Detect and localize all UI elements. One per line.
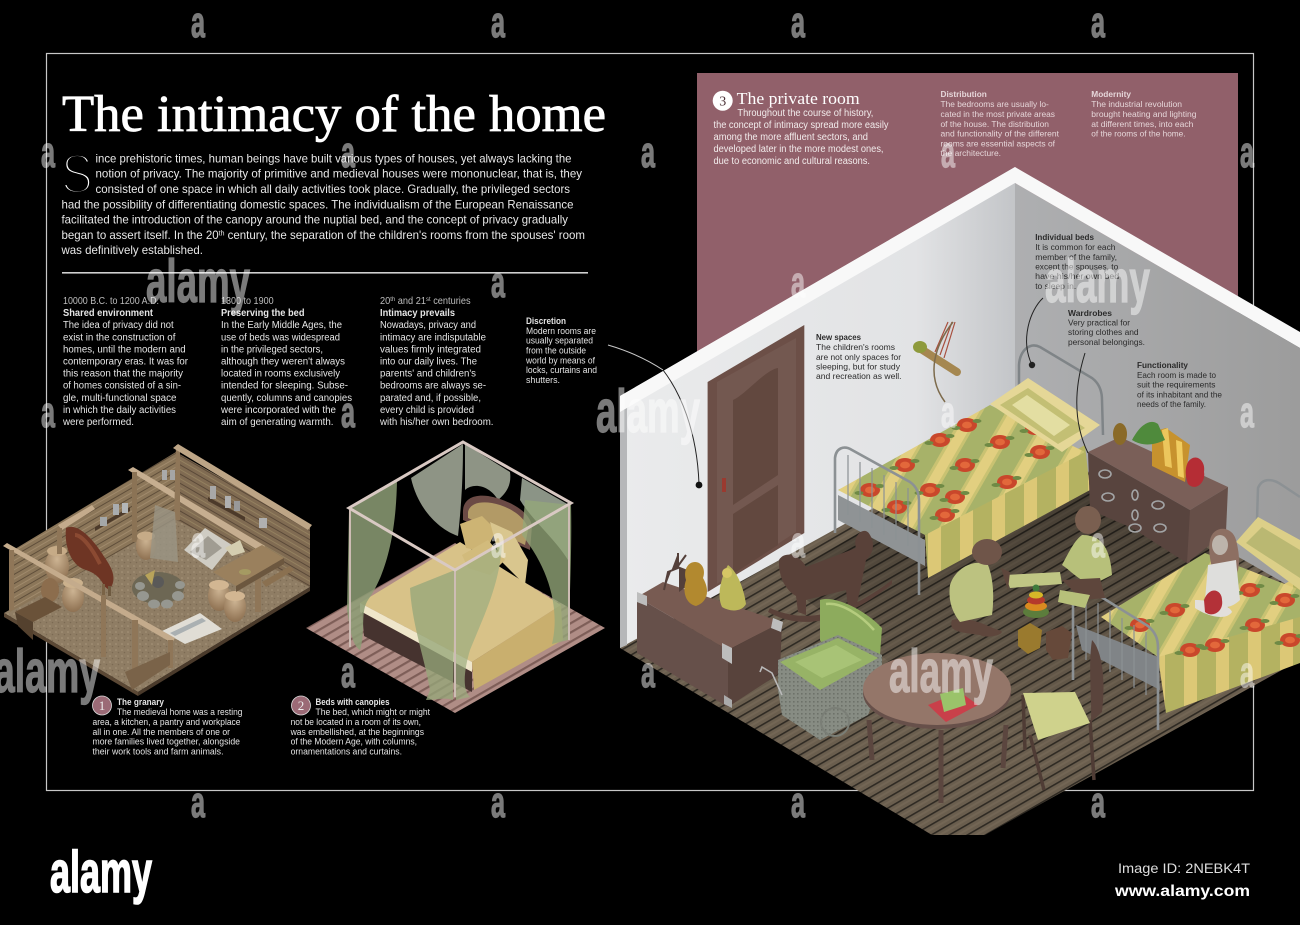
intro text block: had the possibility of differentiating domestic spaces. The individualism of the European Renaissance — [62, 198, 574, 211]
hearth stones — [132, 570, 185, 608]
heading: the private room — [713, 89, 888, 167]
granary back walls — [10, 452, 176, 612]
intro text block: ince prehistoric times, human beings have built various types of houses, yet always lacking the — [96, 152, 572, 165]
text: modernity — [1091, 89, 1197, 138]
heading: the private room: Throughout the course of history, — [737, 108, 873, 119]
intro text block: century, the separation of the children's rooms from the spouses' room — [224, 229, 585, 242]
caption: beds with canopies: not be located in a room of its own, — [291, 717, 421, 727]
column: intimacy prevails: 20 — [380, 296, 391, 307]
heading: the private room: The private room — [737, 89, 860, 108]
column: shared environment: this reason that the majority — [63, 369, 183, 380]
column: intimacy prevails: centuries — [431, 296, 471, 307]
column: intimacy prevails: bedrooms are always se- — [380, 381, 486, 392]
callout: discretion: world by means of — [525, 356, 596, 366]
boy with back turned — [949, 539, 1002, 637]
watermark pattern: a — [791, 518, 805, 567]
column: intimacy prevails: Intimacy prevails — [380, 308, 455, 319]
heading: the private room: due to economic and cultural reasons. — [714, 156, 870, 167]
cover — [838, 405, 1085, 535]
chest — [15, 597, 62, 622]
watermark pattern: a — [491, 778, 505, 827]
callout: discretion: locks, curtains and — [526, 365, 597, 375]
column: shared environment: The idea of privacy did not — [63, 320, 174, 331]
column: shared environment: 10000 B.C. to 1200 A.D. — [63, 296, 159, 307]
watermark pattern: a — [491, 518, 505, 567]
number badge 2: 2 — [298, 698, 304, 713]
illustration: children's bedroom — [608, 167, 1300, 835]
text: distribution: and functionality of the different — [940, 128, 1060, 138]
white rug — [162, 613, 222, 644]
text: wardrobes: storing clothes and — [1068, 327, 1139, 337]
text: distribution: of the house. The distribution — [940, 119, 1049, 129]
column: preserving the bed: intended for sleeping. Subse- — [221, 381, 348, 392]
text: new spaces: and recreation as well. — [816, 371, 902, 381]
column: preserving the bed: 1300 to 1900 — [221, 296, 274, 307]
text: functionality: needs of the family. — [1137, 399, 1206, 409]
heading: the private room: developed later in the more modest ones, — [714, 144, 884, 155]
left wall end cap — [620, 392, 627, 648]
right wall — [1015, 183, 1300, 592]
illustration: medieval granary — [3, 444, 312, 696]
mattress and pillows — [360, 542, 561, 662]
chair — [1023, 640, 1104, 790]
table — [863, 653, 1011, 803]
interior divider beam and posts — [128, 467, 265, 552]
back curtains — [411, 444, 463, 536]
column: shared environment: homes, until the modern and — [63, 344, 186, 355]
column: intimacy prevails: intimacy are indisputable — [380, 332, 486, 343]
caption: the granary: their work tools and farm animals. — [92, 746, 224, 756]
watermark pattern: alamy — [596, 378, 700, 445]
number badge 3: 3 — [719, 94, 726, 110]
text: functionality: of its inhabitant and the — [1137, 390, 1222, 400]
caption: the granary: The granary — [117, 697, 164, 707]
text: distribution — [940, 89, 1060, 158]
text: modernity: brought heating and lighting — [1091, 109, 1197, 119]
text: modernity: at different times, into each — [1091, 119, 1194, 129]
intro text block: facilitated the introduction of the canopy around the nuptial bed, and the concept of privacy gradually — [62, 214, 568, 227]
heading: the private room: among the more affluent sectors, and — [714, 132, 868, 143]
toy reindeer — [664, 553, 690, 590]
watermark pattern: a — [491, 258, 505, 307]
column: intimacy prevails: Nowadays, privacy and — [380, 320, 476, 331]
left wall — [620, 167, 1015, 648]
watermark pattern: a — [341, 388, 355, 437]
watermark pattern: a — [41, 388, 55, 437]
pillow — [1236, 517, 1300, 590]
text: modernity: Modernity — [1091, 89, 1131, 99]
column: intimacy prevails — [379, 296, 494, 428]
column: preserving the bed: were incorporated with the — [220, 405, 336, 416]
doll — [720, 565, 746, 610]
rocking horse — [768, 531, 892, 622]
number badge 2 — [292, 696, 310, 715]
text: individual beds — [1035, 232, 1119, 291]
toy red — [1186, 457, 1204, 487]
caption: beds with canopies — [290, 696, 431, 756]
front beams and posts — [3, 505, 175, 690]
number badge 1: 1 — [99, 698, 105, 713]
column: preserving the bed: although they weren't always — [221, 356, 345, 368]
watermark pattern: a — [191, 518, 205, 567]
panel: private room colour backdrop — [697, 73, 1238, 358]
text: distribution: Distribution — [940, 89, 987, 99]
drop cap: S — [61, 142, 93, 205]
bed sides — [925, 445, 1090, 578]
chest with toys — [637, 553, 783, 708]
column: preserving the bed: located in rooms exclusively — [221, 369, 340, 380]
watermark pattern: a — [941, 128, 955, 177]
watermark pattern: a — [1240, 648, 1254, 697]
watermark pattern: a — [341, 648, 355, 697]
bed headboard — [463, 496, 532, 550]
callout: discretion: Discretion — [526, 316, 566, 326]
column: intimacy prevails: with his/her own bedroom. — [379, 417, 494, 428]
illustration: four poster bed with canopy — [306, 442, 605, 713]
column: preserving the bed: In the Early Middle Ages, the — [221, 320, 342, 331]
watermark pattern: a — [341, 128, 355, 177]
bed two — [1073, 480, 1300, 730]
foot rail — [1073, 588, 1158, 730]
watermark pattern: a — [1091, 518, 1105, 567]
caption: beds with canopies: ornamentations and curtains. — [291, 746, 402, 756]
watermark pattern: a — [1091, 778, 1105, 827]
callout: discretion — [525, 316, 597, 385]
watermark pattern: a — [641, 648, 655, 697]
books on table — [928, 688, 978, 722]
text: individual beds: have his/her own bed — [1035, 271, 1119, 281]
caption: beds with canopies: Beds with canopies — [316, 697, 390, 707]
intro text block: was definitively established. — [61, 244, 203, 257]
intro text block: th — [219, 230, 225, 238]
text: wardrobes: personal belongings. — [1068, 337, 1145, 347]
intro text block — [61, 142, 585, 257]
number badge 1 — [92, 696, 112, 715]
text: new spaces: The children's rooms — [816, 342, 895, 352]
column: intimacy prevails: st — [426, 296, 431, 303]
column: preserving the bed: Preserving the bed — [221, 308, 304, 319]
watermark pattern: a — [791, 258, 805, 307]
pram — [760, 599, 882, 740]
dresser — [1088, 422, 1228, 565]
loom and cloth — [150, 505, 178, 562]
text: functionality: suit the requirements — [1137, 380, 1216, 390]
footer: image id and site: www.alamy.com — [1114, 883, 1250, 900]
column: shared environment: Shared environment — [63, 308, 154, 319]
caption: the granary: all in one. All the members of one or — [92, 727, 230, 737]
heading: the private room: the concept of intimacy spread more easily — [714, 120, 888, 131]
text: wardrobes: Wardrobes — [1068, 308, 1112, 318]
front curtains and poles — [410, 570, 455, 700]
bed one — [835, 346, 1103, 595]
title: The intimacy of the home — [62, 86, 606, 143]
callout: discretion: shutters. — [526, 375, 560, 385]
watermark pattern: a — [941, 388, 955, 437]
granary floor — [4, 518, 310, 692]
door — [708, 325, 804, 592]
caption: the granary: area, a kitchen, a pantry and workplace — [92, 717, 241, 727]
text: functionality: Each room is made to — [1137, 370, 1216, 380]
text: individual beds: to sleep in. — [1035, 281, 1076, 291]
head rail — [1257, 480, 1300, 520]
wall top band — [620, 167, 1300, 412]
watermark pattern: alamy — [1045, 248, 1150, 315]
column: intimacy prevails: every child is provided — [380, 405, 474, 416]
callout: discretion: usually separated — [526, 336, 593, 346]
column: shared environment: gle, multi-functional space — [63, 393, 177, 404]
watermark pattern: a — [1240, 128, 1254, 177]
text: wardrobes: Very practical for — [1068, 318, 1130, 328]
caption: the granary: The medieval home was a resting — [117, 707, 242, 717]
caption: beds with canopies: was embellished, at the beginnings — [290, 727, 425, 737]
column: shared environment: were performed. — [62, 417, 134, 428]
caption: beds with canopies: of the Modern Age, with columns, — [291, 736, 417, 746]
text: individual beds: except the spouses, to — [1035, 262, 1118, 272]
watermark pattern: a — [1240, 388, 1254, 437]
text: individual beds: member of the family, — [1035, 252, 1117, 262]
text: new spaces: New spaces — [816, 332, 861, 342]
intro text block: began to assert itself. In the 20 — [62, 229, 220, 242]
footer: image id and site: Image ID: 2NEBK4T — [1118, 860, 1250, 876]
column: shared environment: of homes consisted of a sin- — [63, 381, 181, 392]
intro text block: notion of privacy. The majority of primitive and medieval houses were mononuclear, that is, they — [96, 168, 582, 181]
text: functionality — [1137, 360, 1222, 409]
column: preserving the bed: in the privileged sectors, — [221, 344, 323, 355]
watermark pattern: a — [191, 778, 205, 827]
barrels — [41, 532, 246, 622]
teddy bear — [684, 562, 707, 606]
text: individual beds: It is common for each — [1035, 242, 1116, 252]
intro text block: consisted of one space in which all daily activities took place. Gradually, the privileged sectors — [96, 183, 570, 196]
footer: stock logo: alamy — [50, 840, 152, 905]
column: preserving the bed: quently, columns and canopies — [221, 393, 352, 404]
column: intimacy prevails: values firmly integrated — [380, 344, 481, 355]
text: distribution: the architecture. — [940, 148, 1001, 158]
column: shared environment: in which the daily activities — [63, 405, 176, 416]
column: preserving the bed: aim of generating warmth. — [221, 417, 334, 428]
foot rail — [835, 448, 919, 595]
pillow — [990, 378, 1100, 452]
column: intimacy prevails: parated and, if possible, — [380, 393, 481, 404]
watermark pattern: a — [791, 778, 805, 827]
footer: image id and site — [1114, 860, 1250, 900]
stacking rings toy — [1023, 584, 1049, 618]
callout lines — [608, 298, 1088, 488]
text: distribution: rooms are essential aspects of — [940, 138, 1056, 148]
caption: beds with canopies: The bed, which might or might — [316, 707, 431, 717]
caption: the granary: more families lived together, alongside — [92, 736, 240, 746]
callout: discretion: from the outside — [526, 346, 586, 356]
text: modernity: of the rooms of the home. — [1091, 128, 1186, 138]
text: wardrobes — [1068, 308, 1145, 347]
text: functionality: Functionality — [1137, 360, 1188, 370]
horse — [66, 527, 114, 596]
column: intimacy prevails: parents' and children's — [380, 369, 476, 380]
text: modernity: The industrial revolution — [1091, 99, 1182, 109]
seated child — [1001, 506, 1112, 608]
watermark pattern: alamy — [889, 638, 993, 705]
work table and benches — [213, 545, 294, 592]
caption: the granary — [92, 696, 242, 756]
text: distribution: The bedrooms are usually lo- — [940, 99, 1049, 109]
column: shared environment: contemporary eras. It was for — [63, 356, 189, 368]
column: preserving the bed — [220, 296, 352, 428]
column: intimacy prevails: and 21 — [395, 296, 426, 307]
page frame — [46, 54, 1254, 790]
column: intimacy prevails: into our daily lives. The — [380, 356, 477, 368]
wall decoration: bow and quiver — [913, 322, 957, 402]
text: new spaces — [816, 332, 902, 381]
girl — [1195, 529, 1240, 617]
text: distribution: cated in the most private areas — [940, 109, 1055, 119]
column: intimacy prevails: th — [390, 296, 396, 303]
text: individual beds: Individual beds — [1035, 232, 1094, 242]
text: new spaces: sleeping, but for study — [816, 362, 901, 372]
toy blocks — [1018, 623, 1072, 660]
room floor — [620, 425, 1300, 835]
column: preserving the bed: use of beds was widespread — [221, 332, 340, 343]
callout: discretion: Modern rooms are — [526, 326, 596, 336]
text: new spaces: are not only spaces for — [816, 352, 901, 362]
floor shadow near walls — [780, 440, 1300, 760]
watermark pattern: alamy — [146, 248, 250, 315]
column: shared environment — [62, 296, 189, 428]
plank floor — [306, 543, 605, 713]
column: shared environment: exist in the construction of — [63, 332, 176, 343]
shelves with pots — [95, 470, 267, 531]
head rail — [1019, 346, 1103, 440]
watermark pattern: a — [641, 128, 655, 177]
books — [1152, 428, 1190, 482]
number badge 3 — [713, 91, 733, 111]
teddy small — [1113, 423, 1127, 445]
watermark pattern: a — [41, 128, 55, 177]
toy dinosaur — [1132, 422, 1165, 444]
